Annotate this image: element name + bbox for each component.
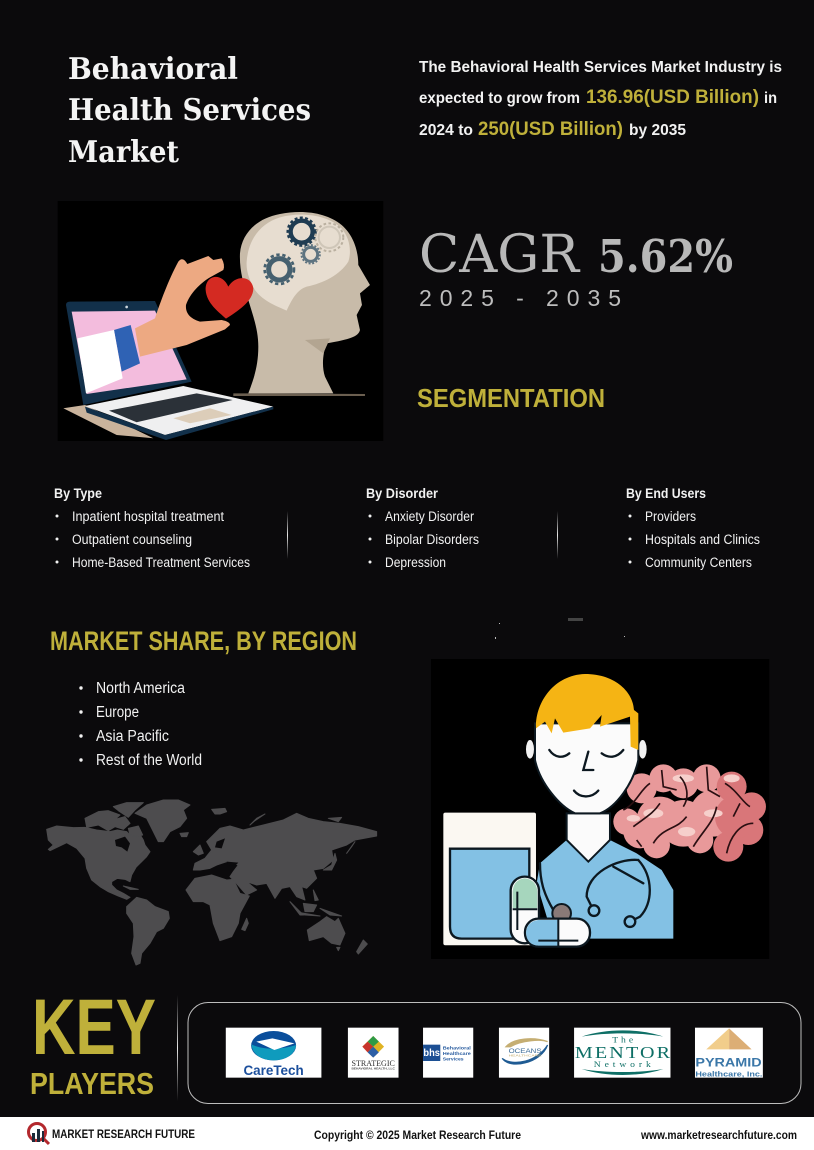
market growth summary text: expected to grow from: [419, 90, 580, 107]
brain: [613, 764, 766, 862]
logo: Pyramid Healthcare: Healthcare, Inc.: [695, 1069, 762, 1078]
illustration: doctor with brain, clipboard and pills: [431, 659, 769, 959]
segment list: by end users: [626, 485, 760, 570]
gears: [265, 218, 343, 284]
neck: [567, 813, 610, 862]
logo: Oceans Healthcare: [499, 1028, 549, 1078]
title: Market: [68, 135, 179, 170]
footer: MARKET RESEARCH FUTURE: [52, 1127, 195, 1141]
logo: Oceans Healthcare: HEALTHCARE: [509, 1054, 543, 1057]
key players heading: PLAYERS: [30, 1066, 154, 1101]
illustration: hand from laptop giving heart to head: [58, 201, 383, 441]
panel: key players logos: [188, 1002, 801, 1104]
segmentation heading: SEGMENTATION: [417, 383, 605, 413]
logo: Pyramid Healthcare: PYRAMID: [695, 1055, 762, 1069]
title: [68, 52, 311, 170]
market growth summary text: 136.96(USD Billion): [586, 87, 759, 108]
segment list: by disorder: [366, 485, 479, 570]
region list: [79, 680, 202, 769]
icon: market research future logo: [28, 1124, 49, 1144]
logo: Pyramid Healthcare: [695, 1028, 763, 1078]
market growth summary text: 250(USD Billion): [478, 119, 623, 140]
logo: Strategic Behavioral Health: [348, 1028, 399, 1078]
logo: The Mentor Network: Network: [594, 1060, 651, 1069]
segment list: by end users: Providers: [645, 509, 696, 524]
CAGR figure: 5.62%: [598, 230, 733, 283]
market share heading: MARKET SHARE, BY REGION: [50, 626, 357, 656]
face: [535, 723, 638, 813]
logo: Oceans Healthcare: OCEANS: [509, 1048, 542, 1055]
region list: Europe: [96, 704, 139, 721]
region list: Rest of the World: [96, 752, 202, 769]
logo: The Mentor Network: [574, 1028, 671, 1078]
footer: [0, 1117, 814, 1150]
segment list: by type: Inpatient hospital treatment: [72, 509, 224, 524]
region list: Asia Pacific: [96, 728, 169, 745]
clipboard: [443, 813, 536, 945]
title: Health Services: [68, 93, 311, 128]
segment list: by type: By Type: [54, 485, 102, 501]
CAGR figure: 2025 - 2035: [419, 285, 621, 311]
segment list: by disorder: Bipolar Disorders: [385, 532, 479, 547]
segment list: by end users: Community Centers: [645, 555, 752, 570]
logo: Behavioral Healthcare Services: bhs: [423, 1048, 440, 1059]
footer: Copyright © 2025 Market Research Future: [314, 1128, 521, 1142]
laptop: [66, 301, 192, 405]
region list: North America: [96, 680, 185, 697]
arm and hand: [135, 256, 230, 357]
segment list: by end users: Hospitals and Clinics: [645, 532, 760, 547]
segment list: by disorder: Depression: [385, 555, 446, 570]
logo: Behavioral Healthcare Services: Healthcare: [443, 1051, 471, 1057]
world map: [47, 800, 377, 965]
market growth summary text: in: [764, 90, 777, 107]
logo: Strategic Behavioral Health: STRATEGIC: [352, 1059, 395, 1069]
logo: Behavioral Healthcare Services: Behavioral: [443, 1046, 471, 1051]
segment list: by disorder: Anxiety Disorder: [385, 509, 474, 524]
segment list: by type: [54, 485, 250, 570]
heart: [206, 277, 253, 319]
market growth summary text: by 2035: [629, 122, 686, 139]
head silhouette: [240, 212, 370, 393]
key players heading: [30, 982, 156, 1101]
segment list: by disorder: By Disorder: [366, 485, 438, 501]
CAGR figure: [419, 225, 733, 311]
market growth summary text: The Behavioral Health Services Market Industry is: [419, 59, 782, 76]
logo: CareTech: [226, 1028, 321, 1079]
torso: [537, 840, 673, 939]
logo: Strategic Behavioral Health: BEHAVIORAL HEALTH, LLC: [352, 1067, 396, 1071]
logo: Behavioral Healthcare Services: Services: [443, 1057, 464, 1062]
pills: [511, 877, 539, 943]
segment list: by type: Outpatient counseling: [72, 532, 192, 547]
segment list: by type: Home-Based Treatment Services: [72, 555, 250, 570]
logo: Behavioral Healthcare Services: [423, 1028, 473, 1078]
CAGR figure: CAGR: [419, 225, 581, 285]
key players heading: KEY: [32, 982, 156, 1071]
market growth summary text: [419, 59, 782, 140]
hair: [536, 674, 638, 750]
title: Behavioral: [68, 52, 238, 87]
logo: The Mentor Network: MENTOR: [575, 1044, 671, 1062]
segment list: by end users: By End Users: [626, 485, 706, 501]
logo: The Mentor Network: The: [612, 1035, 633, 1044]
market growth summary text: 2024 to: [419, 122, 473, 139]
ears: [526, 740, 534, 759]
logo: CareTech: CareTech: [243, 1063, 304, 1079]
